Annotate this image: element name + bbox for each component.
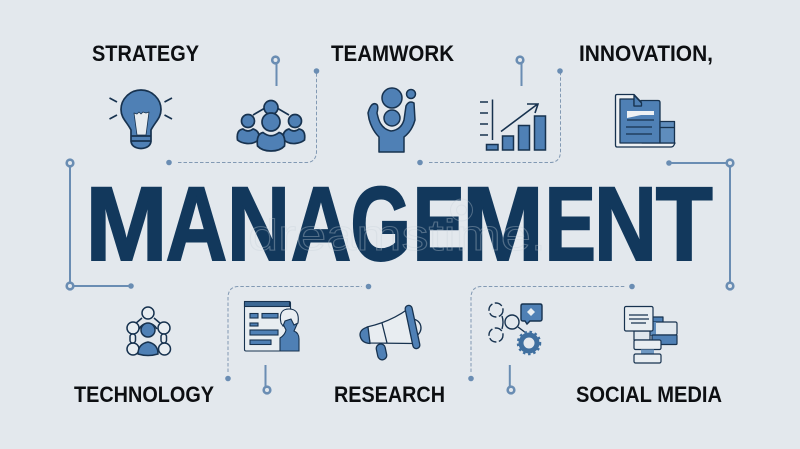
heading: TEAMWORK: TEAMWORK xyxy=(331,41,455,66)
icon: person with raised arms xyxy=(368,88,416,152)
icon: megaphone xyxy=(360,305,421,361)
heading: SOCIAL MEDIA: SOCIAL MEDIA xyxy=(576,382,722,407)
title: MANAGEMENT: A xyxy=(291,166,351,283)
connector: dashed bottom right xyxy=(468,284,635,381)
connector: dashed top right xyxy=(417,68,563,165)
connector: pin below network icon xyxy=(508,365,514,393)
connector: left bracket xyxy=(67,160,134,289)
title: MANAGEMENT: G xyxy=(350,166,411,283)
title: MANAGEMENT: N xyxy=(594,166,657,283)
icon: documents xyxy=(616,94,675,147)
icon: stacked message blocks xyxy=(624,306,677,363)
connector: dashed top left xyxy=(166,68,319,165)
icon: light bulb xyxy=(110,90,172,148)
watermark: dreamstime. xyxy=(248,211,546,260)
title: MANAGEMENT: N xyxy=(227,166,290,283)
title: MANAGEMENT: T xyxy=(656,166,713,283)
connector: pin below research icon xyxy=(264,365,270,393)
title: MANAGEMENT: E xyxy=(413,166,465,283)
icon: team of people xyxy=(237,100,305,151)
heading: TECHNOLOGY: TECHNOLOGY xyxy=(74,382,214,407)
title: MANAGEMENT: A xyxy=(166,166,227,283)
icon: growth chart xyxy=(480,100,546,150)
heading: STRATEGY: STRATEGY xyxy=(92,41,199,66)
icon: connected people network xyxy=(127,307,170,356)
title: MANAGEMENT: E xyxy=(545,166,596,283)
connector: right bracket xyxy=(666,160,733,289)
icon: nodes, chat bubble and gear xyxy=(489,303,542,354)
connector: dashed bottom left xyxy=(225,284,371,381)
title: MANAGEMENT: M xyxy=(462,166,544,283)
heading: RESEARCH: RESEARCH xyxy=(334,382,445,407)
heading: INNOVATION: INNOVATION, xyxy=(579,41,713,66)
connector: pin above team icon xyxy=(272,57,279,86)
icon: profile with data panel xyxy=(244,302,299,351)
connector: pin above chart icon xyxy=(517,57,523,86)
watermark xyxy=(248,199,546,260)
title: MANAGEMENT: M xyxy=(86,166,168,283)
